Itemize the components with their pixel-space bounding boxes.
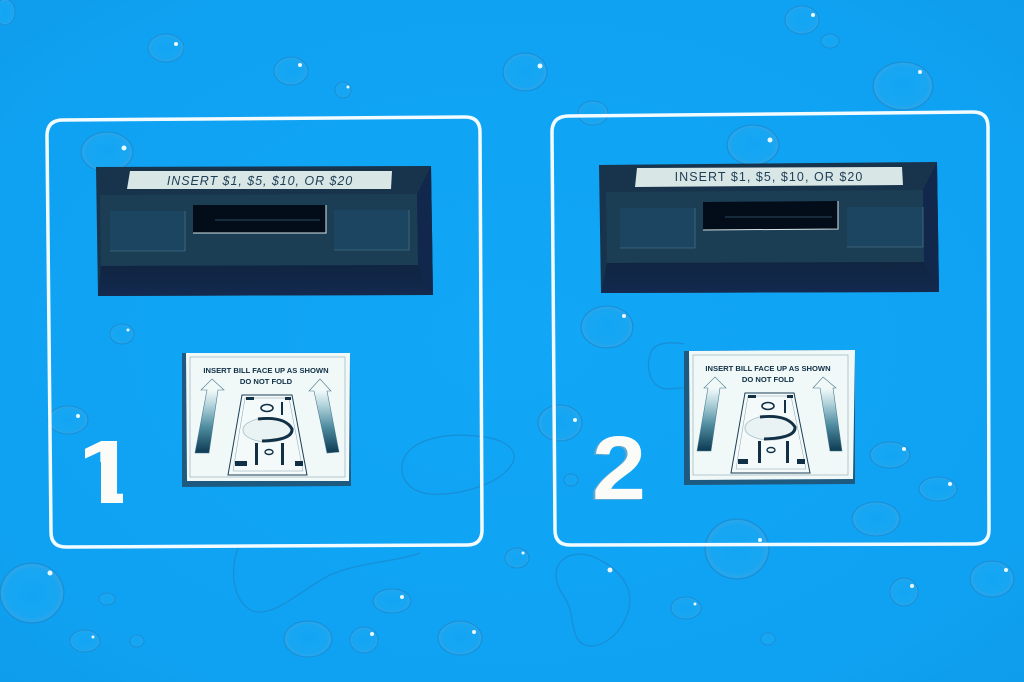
arrow left <box>697 377 726 451</box>
instruction card 1: DO NOT FOLD <box>240 377 293 386</box>
left recess <box>620 208 695 248</box>
right recess <box>334 210 409 250</box>
denomination label <box>635 167 903 187</box>
denomination label: INSERT $1, $5, $10, OR $20 <box>675 170 863 184</box>
denomination label: INSERT $1, $5, $10, OR $20 <box>167 174 353 188</box>
instruction card 2 <box>684 350 855 485</box>
instruction card 1 <box>182 353 351 487</box>
bill slot <box>193 205 326 233</box>
denomination label <box>127 171 392 189</box>
bill acceptor 1 <box>96 166 433 296</box>
banknote <box>228 395 307 475</box>
panel 2 <box>552 112 989 545</box>
panel 2 outline <box>552 112 989 545</box>
right recess <box>847 207 923 247</box>
number 1: 1 <box>72 421 140 522</box>
banknote <box>731 393 810 473</box>
instruction card 2: DO NOT FOLD <box>742 375 795 384</box>
number 2: 2 <box>592 417 646 518</box>
instruction card 1: INSERT BILL FACE UP AS SHOWN <box>203 366 329 375</box>
instruction card 2: INSERT BILL FACE UP AS SHOWN <box>705 364 831 373</box>
panel 1 outline <box>47 117 482 547</box>
bill slot <box>703 201 838 230</box>
large flat water blobs <box>234 343 684 646</box>
bill acceptor 2 <box>599 162 939 293</box>
arrow left <box>195 379 224 453</box>
panel 1 <box>47 117 482 547</box>
arrow right <box>309 379 339 453</box>
arrow right <box>813 377 842 451</box>
left recess <box>110 211 185 251</box>
